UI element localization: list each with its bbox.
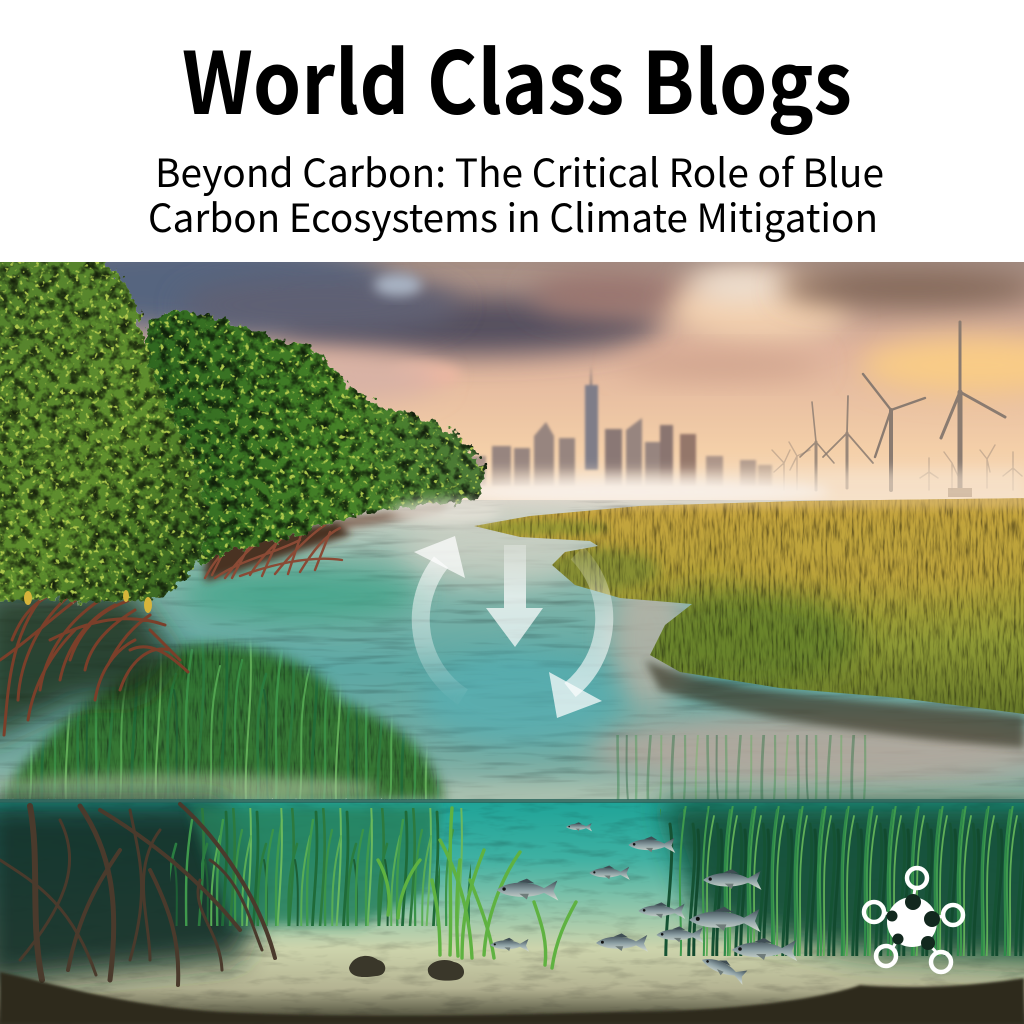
dark sediment floor bbox=[0, 972, 1024, 1024]
dark root shadow bbox=[0, 590, 180, 745]
mist over far shoreline bbox=[390, 500, 500, 524]
wind turbines bbox=[772, 322, 1022, 497]
carbon cycle arrows bbox=[414, 536, 604, 718]
salt marsh grass bbox=[474, 498, 1024, 714]
subtitle: Carbon Ecosystems in Climate Mitigation bbox=[148, 188, 878, 244]
yellow leaves bbox=[24, 590, 152, 613]
water bbox=[0, 500, 1024, 807]
right dark water bbox=[660, 802, 1024, 965]
large turbine bbox=[941, 322, 1005, 497]
reflection under marsh bbox=[645, 660, 1024, 748]
left arc arrow bbox=[414, 536, 465, 697]
right arc arrow bbox=[549, 553, 604, 718]
underwater mangrove roots bbox=[0, 804, 275, 985]
subtitle: Beyond Carbon: The Critical Role of Blue bbox=[155, 143, 884, 199]
city skyline bbox=[469, 365, 772, 486]
distant turbines bbox=[772, 442, 1022, 490]
far mangrove canopy bbox=[142, 312, 484, 565]
subtitle bbox=[148, 143, 884, 244]
mangrove canopies bbox=[0, 240, 484, 613]
pale blades right bbox=[610, 735, 870, 800]
left dark water bbox=[0, 802, 270, 985]
underwater section bbox=[0, 799, 1024, 1024]
left underwater seagrass bbox=[170, 808, 471, 926]
water surface line bbox=[0, 799, 1024, 803]
far mangrove roots bbox=[205, 503, 450, 582]
submerged seagrass seen through water bbox=[0, 620, 870, 802]
pale shallows along the waterline bbox=[0, 774, 380, 802]
horizon mist bbox=[450, 470, 1024, 506]
near mangrove roots bbox=[0, 590, 188, 735]
left grass underlay bbox=[190, 806, 440, 925]
seagrass bed with soft edges bbox=[0, 635, 452, 800]
central bright seagrass bbox=[378, 808, 576, 968]
sunset sky bbox=[0, 239, 1024, 512]
network logo icon bbox=[864, 868, 963, 972]
seabed rocks bbox=[349, 956, 464, 981]
right underwater seagrass bbox=[660, 806, 1024, 956]
downward arrow bbox=[486, 545, 543, 647]
near mangrove canopy bbox=[0, 240, 207, 606]
fourth turbine bbox=[800, 402, 834, 490]
title: World Class Blogs bbox=[182, 14, 852, 139]
water colour reflections bbox=[172, 519, 1024, 799]
third turbine bbox=[823, 396, 873, 488]
fish school bbox=[490, 822, 797, 985]
second turbine bbox=[863, 374, 925, 490]
